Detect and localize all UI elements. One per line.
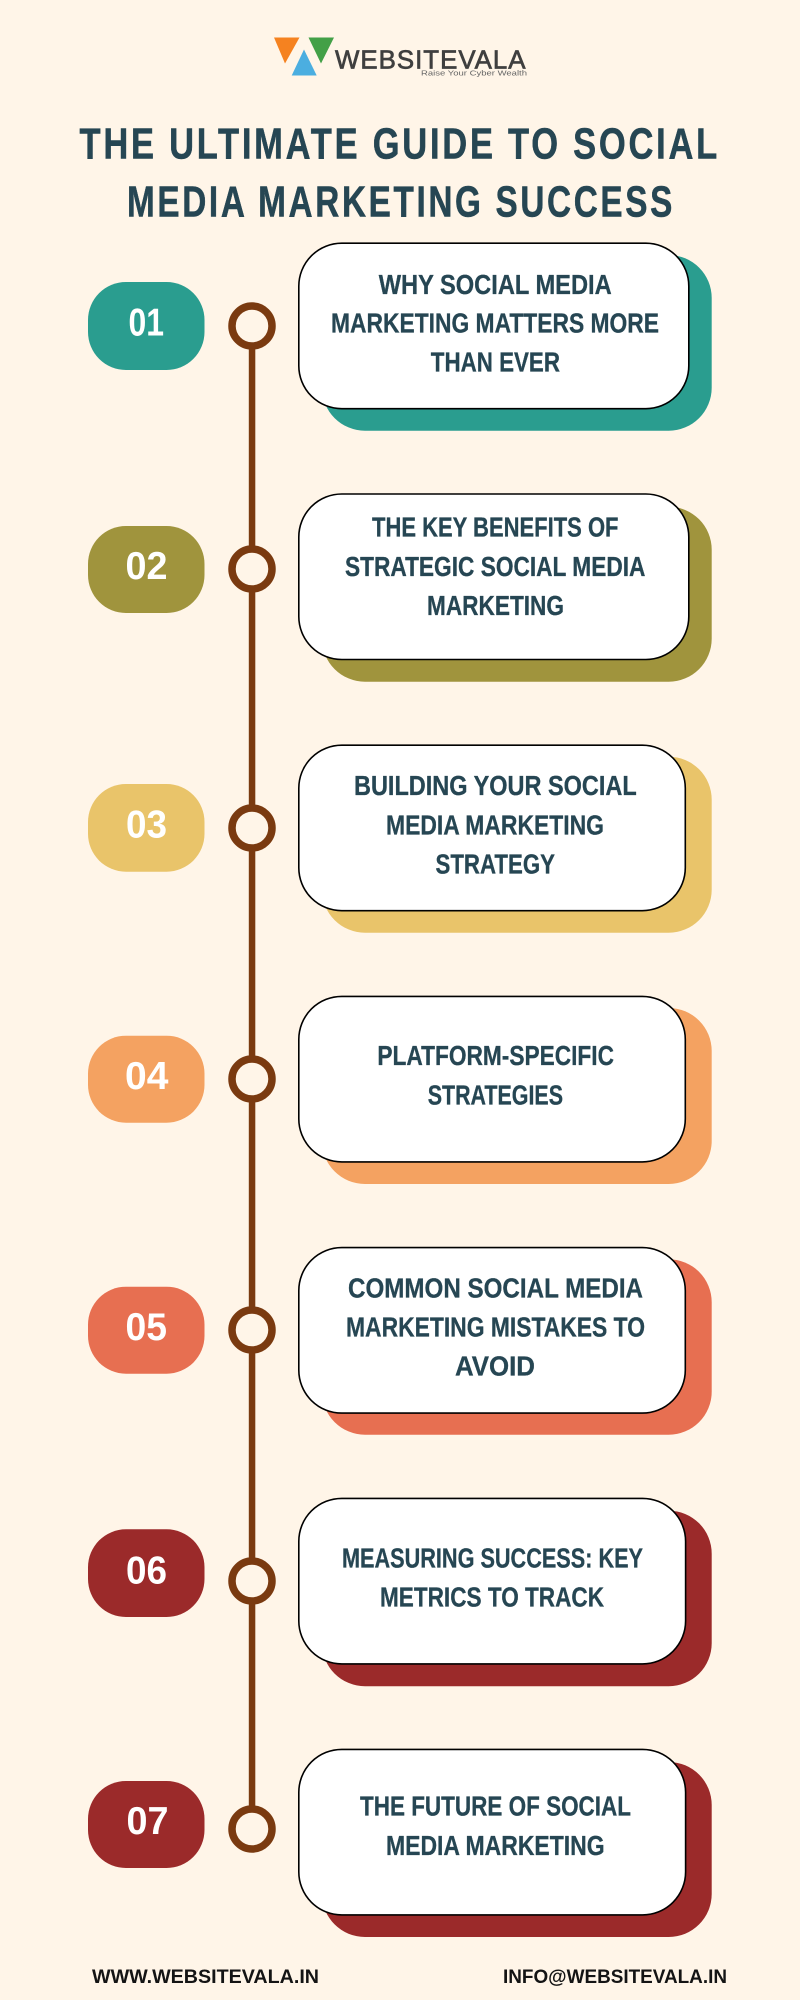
number badge 07 <box>88 1781 204 1868</box>
card text 07: THE FUTURE OF SOCIAL <box>360 1791 631 1822</box>
card text 04: PLATFORM-SPECIFIC <box>377 1040 614 1071</box>
card shadow 01 <box>322 255 712 431</box>
step 04 <box>88 996 712 1184</box>
card text 02: STRATEGIC SOCIAL MEDIA <box>345 551 645 582</box>
card 06 <box>299 1498 686 1664</box>
card text 07 <box>360 1791 631 1861</box>
card text 05: MARKETING MISTAKES TO <box>346 1312 645 1343</box>
card 01 <box>299 243 689 409</box>
card text 04 <box>377 1040 614 1111</box>
timeline node 06 <box>232 1561 272 1601</box>
number badge 03: 03 <box>126 804 167 847</box>
step 06 <box>88 1498 712 1686</box>
card text 07: MEDIA MARKETING <box>386 1830 605 1861</box>
card text 06: MEASURING SUCCESS: KEY <box>342 1543 643 1574</box>
timeline node 05 <box>232 1310 272 1350</box>
timeline node 07 <box>232 1809 272 1849</box>
card 04 <box>299 996 685 1162</box>
footer email: INFO@WEBSITEVALA.IN <box>503 1966 727 1988</box>
icon: blue triangle <box>292 50 317 76</box>
card text 02: THE KEY BENEFITS OF <box>372 512 618 543</box>
number badge 04 <box>88 1036 204 1123</box>
number badge 06 <box>88 1529 204 1617</box>
timeline line <box>249 326 255 1829</box>
timeline node 02 <box>232 549 272 589</box>
number badge 05: 05 <box>126 1306 167 1349</box>
card text 03 <box>354 770 637 879</box>
step 02 <box>88 494 712 682</box>
timeline node 01 <box>232 306 272 346</box>
timeline node 03 <box>232 808 272 848</box>
card shadow 07 <box>322 1762 712 1937</box>
card shadow 02 <box>322 507 712 682</box>
number badge 06: 06 <box>126 1549 167 1592</box>
card 07 <box>299 1749 686 1915</box>
footer website: WWW.WEBSITEVALA.IN <box>92 1966 319 1988</box>
card 05 <box>299 1248 685 1413</box>
timeline node 04 <box>232 1059 272 1099</box>
card text 01: THAN EVER <box>431 347 560 378</box>
card text 05 <box>346 1273 645 1382</box>
card text 01 <box>331 269 659 378</box>
card text 01: MARKETING MATTERS MORE <box>331 308 659 339</box>
number badge 07: 07 <box>126 1800 168 1843</box>
step 05 <box>88 1248 712 1435</box>
logo tagline: Raise Your Cyber Wealth <box>421 70 527 77</box>
number badge 04: 04 <box>125 1055 169 1098</box>
step 07 <box>88 1749 712 1937</box>
card text 03: STRATEGY <box>436 848 555 879</box>
card 03 <box>299 745 685 911</box>
card text 06: METRICS TO TRACK <box>380 1582 604 1613</box>
icon: orange triangle <box>274 38 300 64</box>
card text 03: MEDIA MARKETING <box>386 809 604 840</box>
step 01 <box>88 243 712 431</box>
number badge 03 <box>88 784 204 872</box>
card text 05: AVOID <box>455 1351 535 1382</box>
logo wordmark: WEBSITEVALA <box>335 44 526 74</box>
card text 03: BUILDING YOUR SOCIAL <box>354 770 637 801</box>
card text 01: WHY SOCIAL MEDIA <box>379 269 612 300</box>
card 02 <box>299 494 689 660</box>
number badge 01: 01 <box>128 302 164 345</box>
number badge 02: 02 <box>126 545 168 588</box>
card text 04: STRATEGIES <box>428 1080 563 1111</box>
card text 02 <box>345 512 645 621</box>
logo: Websitevala <box>274 38 527 77</box>
card text 02: MARKETING <box>427 590 564 621</box>
card shadow 03 <box>322 757 712 933</box>
title <box>80 119 720 227</box>
card shadow 05 <box>322 1259 712 1435</box>
number badge 05 <box>88 1287 204 1374</box>
card text 06 <box>342 1543 643 1613</box>
step 03 <box>88 745 712 933</box>
number badge 02 <box>88 526 204 613</box>
icon: green triangle <box>308 38 334 64</box>
card shadow 06 <box>322 1511 712 1686</box>
card shadow 04 <box>322 1008 712 1184</box>
card text 05: COMMON SOCIAL MEDIA <box>348 1273 643 1304</box>
number badge 01 <box>88 282 204 370</box>
